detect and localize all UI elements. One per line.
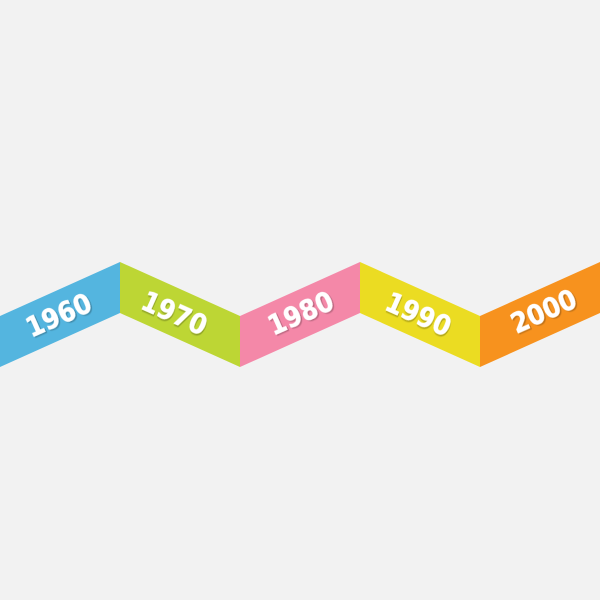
- segment: 1970: 1970: [136, 286, 212, 342]
- segment: 1980: 1980: [263, 286, 339, 342]
- segment: 2000: [480, 262, 600, 367]
- segment: 1990: [360, 262, 480, 367]
- segment: 1990: 1990: [380, 287, 456, 343]
- segment: 1960: 1960: [21, 288, 97, 344]
- segment: 2000: 2000: [506, 284, 582, 340]
- segment: 1980: [240, 262, 360, 367]
- segment: 1970: [120, 262, 240, 367]
- segment: 1960: [0, 262, 120, 367]
